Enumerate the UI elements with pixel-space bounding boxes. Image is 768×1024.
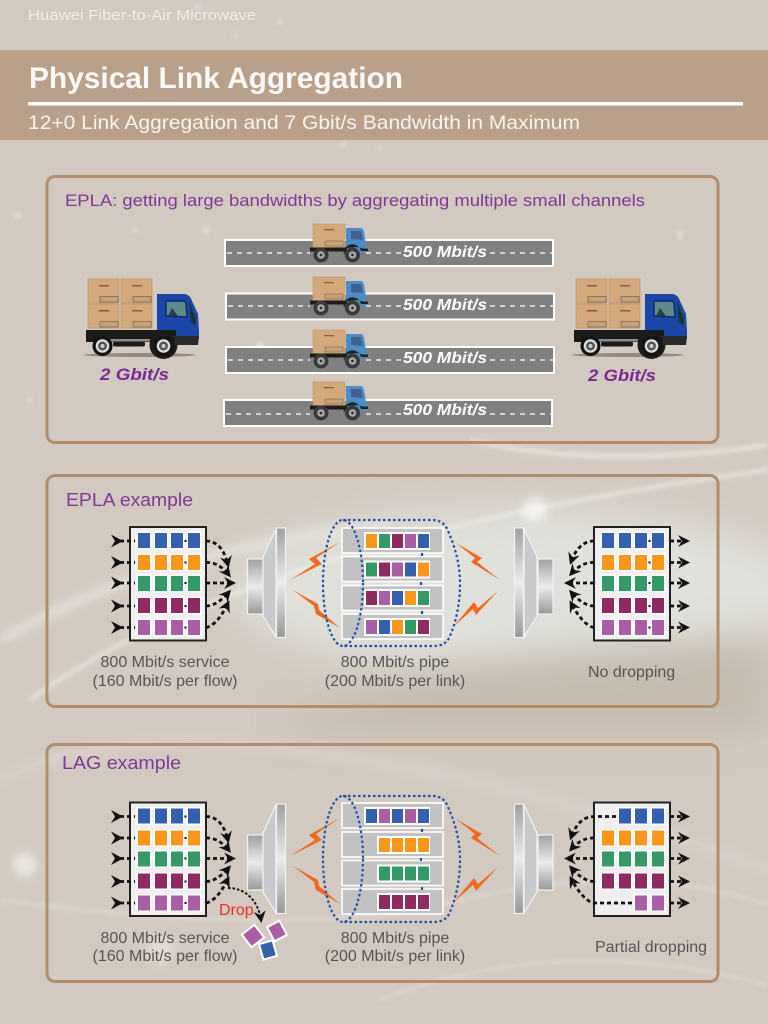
subtitle: 12+0 Link Aggregation and 7 Gbit/s Bandwidth in Maximum [28, 112, 580, 134]
caption: no dropping: No dropping [588, 664, 675, 681]
transmit antenna [248, 528, 286, 638]
caption: service [93, 930, 237, 965]
road 4: 500 Mbit/s [403, 402, 487, 419]
caption: pipe: (200 Mbit/s per link) [325, 948, 465, 965]
title: Physical Link Aggregation [29, 62, 403, 95]
caption: service: (160 Mbit/s per flow) [93, 948, 237, 965]
transmit antenna [248, 804, 286, 914]
radio bolts [290, 818, 500, 904]
title band [0, 50, 768, 140]
drop arrow [228, 888, 261, 920]
heading: EPLA: EPLA: getting large bandwidths by aggregating multiple small channels [65, 191, 645, 210]
receive queue grid with drops [567, 802, 687, 916]
road 3: 500 Mbit/s [403, 350, 487, 367]
caption: service: 800 Mbit/s service [101, 930, 230, 947]
link pipes [323, 796, 460, 922]
road 1: 500 Mbit/s [403, 244, 487, 261]
road 2: 500 Mbit/s [403, 297, 487, 314]
caption: pipe: (200 Mbit/s per link) [325, 673, 465, 690]
service queue grid [111, 802, 233, 916]
radio bolts [290, 542, 500, 628]
caption: service [93, 654, 237, 690]
caption: pipe [325, 654, 465, 690]
label: Drop: Drop [219, 902, 254, 919]
label: right bandwidth: 2 Gbit/s [587, 366, 656, 385]
road 2 [226, 277, 554, 320]
panel: LAG example [47, 744, 718, 982]
caption: service: 800 Mbit/s service [101, 654, 230, 671]
caption: service: (160 Mbit/s per flow) [93, 673, 237, 690]
receive antenna [514, 528, 553, 638]
caption: pipe: 800 Mbit/s pipe [341, 654, 449, 671]
road 1 [225, 224, 553, 266]
service queue grid [111, 527, 233, 640]
receive queue grid [567, 527, 687, 640]
link pipes [323, 520, 460, 646]
heading: LAG example: LAG example [62, 753, 181, 773]
label: left bandwidth: 2 Gbit/s [99, 365, 169, 384]
supertitle: Huawei Fiber-to-Air Microwave [28, 8, 256, 24]
caption: pipe [325, 930, 465, 965]
road 4 [224, 382, 552, 426]
panel: EPLA example [47, 476, 718, 706]
road 3 [226, 330, 554, 373]
dropped packets [242, 921, 287, 960]
panel: EPLA bandwidth aggregation [47, 176, 718, 442]
caption: partial dropping: Partial dropping [595, 939, 707, 956]
icon: large truck left [84, 279, 199, 359]
caption: pipe: 800 Mbit/s pipe [341, 930, 449, 947]
heading: EPLA example: EPLA example [66, 490, 193, 510]
icon: large truck right [572, 279, 687, 359]
receive antenna [514, 804, 553, 914]
